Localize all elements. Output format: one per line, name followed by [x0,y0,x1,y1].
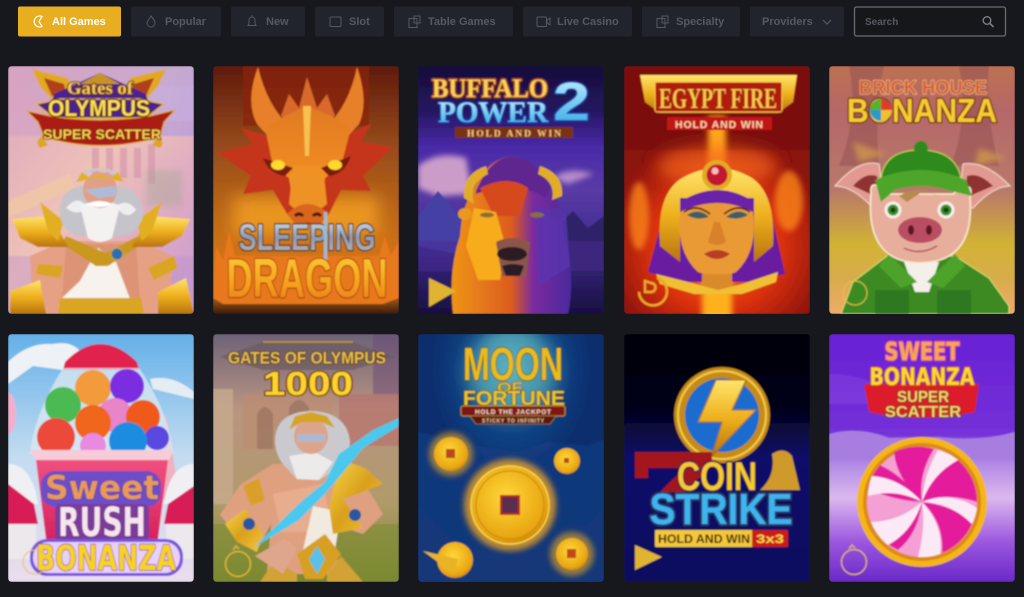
navigation bar [18,6,1006,36]
game logo: SUPER [897,389,949,406]
game logo [30,468,183,579]
button: Live Casino: Live Casino [557,16,619,28]
game logo: DRAGON [226,247,388,309]
game logo: SCATTER [885,404,961,421]
game logo: HOLD AND WIN [467,130,561,140]
game logo: Sweet [45,468,159,507]
game card: Sweet Bonanza Super Scatter [829,334,1015,582]
button: New: New [266,16,289,28]
lightning coin [674,367,770,463]
game logo: BONANZA [847,92,997,129]
game logo: HOLD AND WIN [675,119,763,131]
game logo: EGYPT FIRE [659,84,777,115]
button: Slot: Slot [349,16,370,28]
game logo: BONANZA [870,363,975,391]
game logo: BRICK HOUSE [859,78,987,99]
game logo [640,75,797,131]
button: Providers: Providers [762,16,813,28]
game logo: 1000 [263,365,353,402]
button: Specialty: Specialty [676,16,725,28]
game card: Sweet Rush Bonanza [8,334,194,582]
game card: Sleeping Dragon [213,66,399,314]
button: Table Games [394,6,513,36]
pig character [835,141,1010,314]
button: Providers [750,6,844,36]
game logo: 2 [553,72,590,132]
Zeus figure [10,168,194,314]
game card: Egypt Fire [624,66,810,321]
game logo: RUSH [58,500,146,546]
game logo: STICKY TO INFINITY [482,418,545,424]
gold coins [423,432,594,578]
game logo: STRIKE [650,485,792,534]
game logo [864,337,979,421]
game logo: GATES OF OLYMPUS [228,348,386,368]
provider mark [639,278,667,305]
button: Specialty [642,6,740,36]
provider mark [842,545,866,574]
game logo: FORTUNE [463,388,565,410]
game logo: SLEEPING [238,217,376,258]
candy wheel [857,437,987,567]
game logo: COIN [677,455,757,499]
game logo: BONANZA [36,539,176,579]
provider mark [226,546,250,576]
game logo: OLYMPUS [48,95,150,121]
provider mark [635,545,662,570]
provider mark [843,281,867,305]
button: All Games: All Games [52,16,106,28]
Zeus figure [220,411,383,582]
game card: Brick House Bonanza [829,66,1015,314]
flames [213,231,399,304]
provider mark [23,550,47,574]
game logo [27,69,175,148]
game logo [461,338,565,424]
button: New [231,6,305,36]
gumball machine [30,344,174,539]
bell [760,450,800,490]
game card: Coin Strike [624,334,810,582]
game logo: 3x3 [756,534,784,546]
provider mark [429,278,456,307]
game logo: SUPER SCATTER [43,126,161,142]
game logo: HOLD AND WIN [658,534,750,546]
game card: Buffalo Power 2 [418,66,604,314]
button: Popular [131,6,221,36]
game logo [226,212,388,309]
search box: Search [865,17,898,28]
game card: Moon of Fortune [418,326,604,584]
game logo: MOON [463,338,563,390]
lightning bolt [253,418,399,548]
game logo: OF [497,379,524,395]
game card: Gates of Olympus Super Scatter [8,66,194,314]
red seven [635,452,712,492]
button: All Games [18,6,121,36]
game card: Gates of Olympus 1000 [213,334,399,582]
button: Slot [315,6,384,36]
buffalo [452,157,571,314]
game logo: HOLD THE JACKPOT [475,409,551,416]
pharaoh queen [648,160,785,294]
button: Live Casino [523,6,632,36]
game logo [432,72,590,140]
button: Popular: Popular [165,16,207,28]
game logo: SWEET [884,337,960,366]
game logo [650,455,792,547]
game logo: POWER [438,96,548,129]
game logo [847,78,997,129]
game logo: Gates of [67,78,134,98]
game logo: BUFFALO [432,74,548,103]
button: Table Games: Table Games [428,16,496,28]
game logo [220,342,395,402]
search box [854,7,1006,36]
dragon head [218,67,393,226]
